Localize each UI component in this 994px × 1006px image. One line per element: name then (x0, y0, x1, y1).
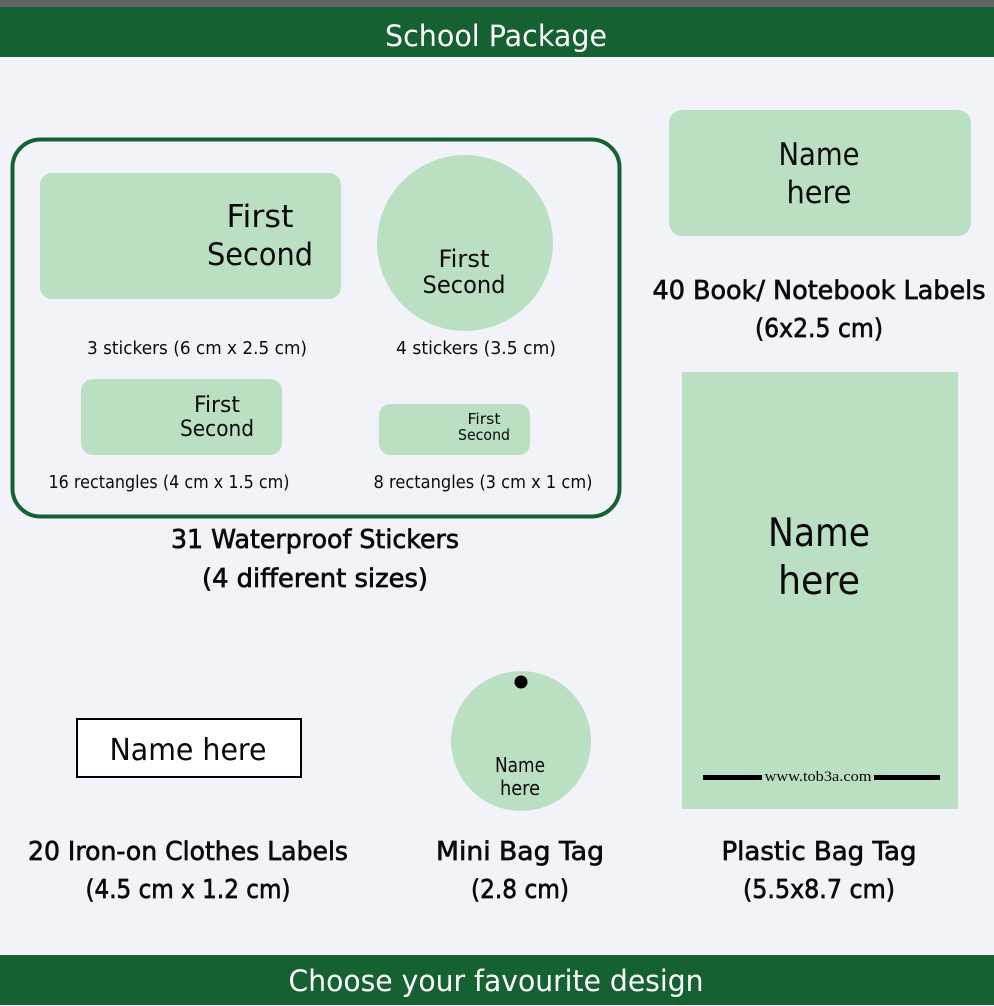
sticker: 3 x 1 cm rectangle: Second (458, 426, 510, 444)
heading: plastic bag tag: Plastic Bag Tag (722, 837, 916, 867)
heading: 31 waterproof stickers: (4 different sizes) (202, 564, 428, 594)
sticker: 4 x 1.5 cm rectangle: First (194, 393, 240, 418)
iron-on clothes label: Name here (110, 733, 266, 768)
heading: mini bag tag: (2.8 cm) (471, 875, 569, 905)
title banner: School Package (385, 19, 607, 53)
sticker: 6 x 2.5 cm rectangle (40, 173, 341, 299)
footer banner: Choose your favourite design (288, 964, 704, 998)
caption: 16 rectangles: 16 rectangles (4 cm x 1.5 cm) (48, 472, 290, 493)
caption: 4 stickers: 4 stickers (3.5 cm) (396, 338, 556, 359)
panel: waterproof stickers (12, 140, 620, 516)
heading: mini bag tag: Mini Bag Tag (436, 837, 604, 867)
heading: 31 waterproof stickers (171, 525, 459, 594)
sticker: 3.5 cm circle: First (438, 245, 490, 273)
sticker: 6 x 2.5 cm rectangle: Second (207, 237, 313, 273)
heading: iron-on labels: (4.5 cm x 1.2 cm) (86, 875, 290, 905)
caption: 3 stickers: 3 stickers (6 cm x 2.5 cm) (87, 338, 307, 359)
heading: 31 waterproof stickers: 31 Waterproof Stickers (171, 525, 459, 555)
book label: Name (778, 137, 860, 173)
plastic bag tag (682, 372, 958, 809)
heading: book labels: (6x2.5 cm) (755, 314, 883, 344)
sticker: 3 x 1 cm rectangle: First (468, 410, 501, 428)
website line (703, 769, 940, 785)
heading: mini bag tag (436, 837, 604, 905)
heading: iron-on labels: 20 Iron-on Clothes Labels (28, 837, 348, 867)
iron-on clothes label (77, 719, 301, 777)
heading: plastic bag tag: (5.5x8.7 cm) (743, 875, 895, 905)
book label: here (786, 175, 852, 211)
heading: book labels: 40 Book/ Notebook Labels (652, 276, 986, 306)
sticker: 4 x 1.5 cm rectangle (81, 379, 282, 455)
sticker: 6 x 2.5 cm rectangle: First (226, 199, 294, 235)
website line: www.tob3a.com (764, 769, 872, 785)
sticker: 3 x 1 cm rectangle (379, 404, 530, 455)
book label (669, 110, 971, 236)
heading: book labels (652, 276, 986, 344)
heading: iron-on labels (28, 837, 348, 905)
plastic bag tag: Name (768, 511, 870, 556)
footer banner (0, 955, 994, 1005)
caption: 8 rectangles: 8 rectangles (3 cm x 1 cm) (374, 472, 592, 493)
sticker: 4 x 1.5 cm rectangle: Second (180, 417, 254, 442)
sticker: 3.5 cm circle: Second (422, 271, 506, 299)
mini bag tag (451, 671, 591, 811)
mini bag tag: here (500, 776, 540, 800)
plastic bag tag: here (778, 559, 860, 604)
mini bag tag: Name (495, 753, 545, 777)
heading: plastic bag tag (722, 837, 916, 905)
title banner (0, 7, 994, 57)
sticker: 3.5 cm circle (377, 155, 553, 331)
